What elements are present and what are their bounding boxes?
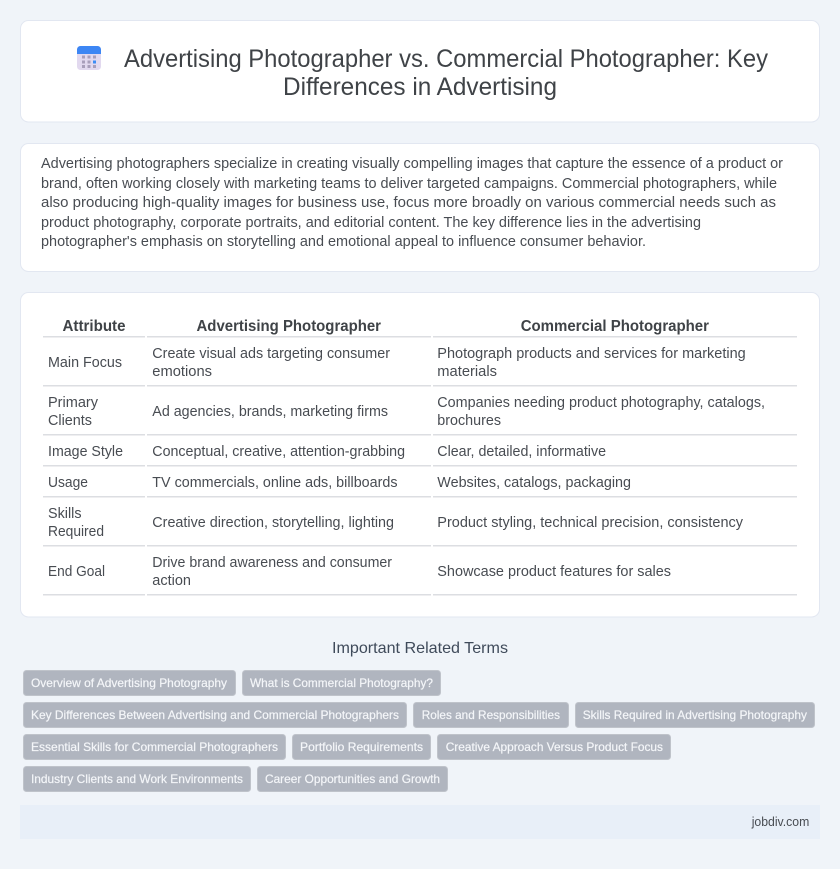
panel: header bbox=[20, 20, 820, 122]
table header: Advertising Photographer bbox=[196, 318, 381, 335]
row: main focus: Main Focus bbox=[48, 355, 122, 371]
row: image style bbox=[43, 444, 797, 466]
row: end goal: Drive brand awareness and consumer bbox=[152, 555, 392, 571]
panel: intro paragraph: brand, often working closely with marketing teams to deliver targeted campaigns. Commercial photographers, while bbox=[41, 176, 777, 192]
table header: Attribute bbox=[62, 318, 126, 335]
related terms tags: Career Opportunities and Growth bbox=[265, 772, 440, 786]
row: usage: Usage bbox=[48, 475, 88, 491]
row: skills required: Skills bbox=[48, 506, 82, 522]
row: end goal: action bbox=[152, 573, 191, 589]
related terms tags: Roles and Responsibilities bbox=[422, 708, 560, 722]
related terms tags: Key Differences Between Advertising and Commercial Photographers bbox=[31, 708, 399, 722]
icon: calendar bbox=[77, 46, 101, 70]
panel: intro paragraph: photographer's emphasis on storytelling and emotional appeal to influence consumer behavior. bbox=[41, 234, 646, 250]
row: skills required: Required bbox=[48, 524, 104, 540]
title bbox=[124, 45, 768, 101]
row: end goal: Showcase product features for sales bbox=[437, 564, 671, 580]
title: Differences in Advertising bbox=[283, 73, 557, 101]
row: primary clients: Companies needing product photography, catalogs, bbox=[437, 395, 765, 411]
footer bbox=[20, 805, 820, 839]
panel: comparison table bbox=[20, 292, 820, 617]
row: main focus: Create visual ads targeting consumer bbox=[152, 346, 390, 362]
panel: intro paragraph: product photography, corporate portraits, and editorial content. The key difference lies in the advertising bbox=[41, 215, 701, 231]
row: main focus: Photograph products and services for marketing bbox=[437, 346, 746, 362]
related terms tags: Creative Approach Versus Product Focus bbox=[446, 740, 663, 754]
row: usage bbox=[43, 475, 797, 498]
related terms tags: Skills Required in Advertising Photography bbox=[583, 708, 807, 722]
row: main focus bbox=[43, 346, 797, 386]
row: end goal: End Goal bbox=[48, 564, 105, 580]
related terms tags: Overview of Advertising Photography bbox=[31, 676, 227, 690]
footer: jobdiv.com bbox=[751, 814, 809, 829]
row: image style: Clear, detailed, informative bbox=[437, 444, 606, 460]
row: skills required: Product styling, technical precision, consistency bbox=[437, 515, 744, 531]
panel: intro paragraph: also producing high-quality images for business use, focus more broadly on various commercial needs such as bbox=[41, 195, 776, 211]
row: image style: Conceptual, creative, attention-grabbing bbox=[152, 444, 405, 460]
row: primary clients: Ad agencies, brands, marketing firms bbox=[152, 404, 388, 420]
related terms tags: Essential Skills for Commercial Photographers bbox=[31, 740, 278, 754]
row: main focus: emotions bbox=[152, 364, 212, 380]
related terms tags: Industry Clients and Work Environments bbox=[31, 772, 243, 786]
panel: intro paragraph bbox=[20, 144, 820, 272]
related terms tags: Portfolio Requirements bbox=[300, 740, 423, 754]
row: skills required: Creative direction, storytelling, lighting bbox=[152, 515, 394, 531]
table header bbox=[43, 318, 797, 338]
row: image style: Image Style bbox=[48, 444, 123, 460]
row: main focus: materials bbox=[437, 364, 497, 380]
panel: intro paragraph: Advertising photographers specialize in creating visually compelling images that capture the essence of a product or bbox=[41, 156, 783, 172]
table header: Commercial Photographer bbox=[521, 318, 709, 335]
row: primary clients: brochures bbox=[437, 413, 501, 429]
row: end goal bbox=[43, 555, 797, 596]
row: usage: TV commercials, online ads, billboards bbox=[152, 475, 398, 491]
related terms tags bbox=[24, 670, 814, 792]
row: primary clients: Clients bbox=[48, 413, 92, 429]
row: usage: Websites, catalogs, packaging bbox=[437, 475, 631, 491]
row: primary clients bbox=[43, 395, 797, 436]
row: primary clients: Primary bbox=[48, 395, 99, 411]
title: Advertising Photographer vs. Commercial Photographer: Key bbox=[124, 45, 768, 73]
related terms tags: What is Commercial Photography? bbox=[250, 676, 433, 690]
row: skills required bbox=[43, 506, 797, 546]
heading: important related terms: Important Related Terms bbox=[332, 640, 508, 657]
